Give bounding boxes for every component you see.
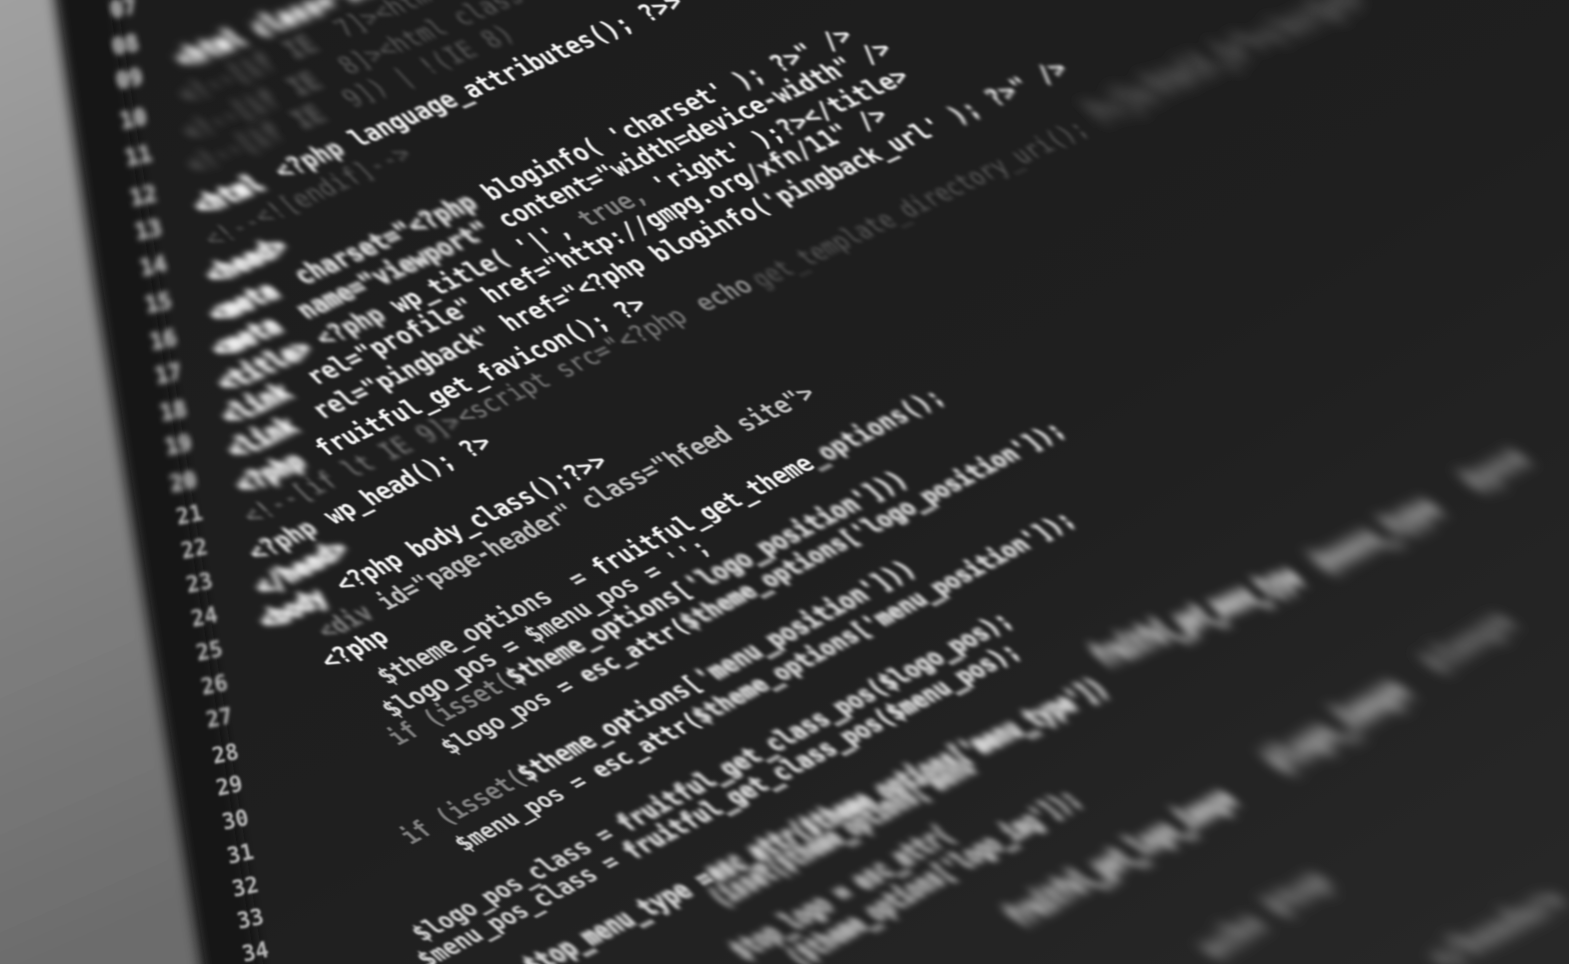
code lines: document head: <?php: [266, 135, 352, 186]
code lines: page header: 'logo_position'])): [677, 466, 915, 597]
code lines: document head: wp_head(); ?>: [316, 429, 500, 530]
code lines: page header: $logo_pos =: [433, 667, 593, 759]
code lines: document head: <script src="<?php: [448, 302, 695, 430]
code lines: page header: 'menu_position'])): [687, 555, 923, 691]
code lines: document head: <title>: [209, 334, 320, 397]
line numbers: 18: [158, 397, 189, 427]
blurred distant code lines: $logo_image: [1257, 673, 1418, 779]
code lines: page header: <div: [310, 599, 381, 645]
line numbers: 14: [138, 252, 169, 282]
code lines: page header: esc_attr(: [571, 613, 696, 688]
top conditional comment lines: <!--[if: [179, 118, 290, 180]
code lines: page header: fruitful_get_class_pos($menu_pos);: [615, 638, 1027, 864]
code lines: page header: fruitful_get_theme: [583, 450, 821, 581]
blurred distant code lines: fruitful_get_logo_image: [997, 782, 1244, 932]
blurred distant code lines: [516, 0, 1569, 964]
code lines: document head: wp_title(: [382, 244, 518, 319]
blurred distant code lines: $pos: [1452, 440, 1537, 497]
line numbers: 25: [194, 637, 225, 667]
line numbers: 26: [199, 671, 230, 701]
line numbers: 32: [230, 873, 261, 903]
line numbers: [108, 0, 271, 964]
line numbers: 30: [220, 806, 251, 836]
code lines: page header: $menu_pos =: [447, 763, 606, 856]
code lines: document head: <link: [213, 378, 299, 430]
line numbers: 24: [189, 603, 220, 633]
top conditional comment lines: IE: [277, 30, 324, 65]
code lines: document head: <link: [219, 412, 305, 464]
code lines: document head: </head>: [246, 535, 356, 601]
line numbers: 22: [179, 535, 210, 565]
monitor bezel shadow: [52, 0, 262, 964]
code lines: document head: true,: [570, 181, 655, 233]
code lines: document head: content="width=device: [489, 91, 775, 234]
code lines: document head: 'right' );: [644, 119, 792, 199]
code lines: page header: id="page-header" class="hfeed site">: [369, 379, 823, 615]
line numbers: 29: [214, 772, 245, 802]
top conditional comment lines: IE: [281, 67, 328, 102]
line numbers: 11: [123, 142, 154, 172]
code lines: document head: name="viewport": [289, 210, 512, 325]
code lines: page header: if (isset(: [392, 765, 534, 849]
code lines: document head: href="<?php bloginfo(: [493, 193, 778, 337]
line numbers: 12: [128, 182, 159, 212]
code lines: document head: <?php: [240, 514, 325, 567]
code lines: document head: ?></title>: [769, 62, 917, 142]
line numbers: 08: [110, 31, 141, 61]
line numbers: 16: [148, 326, 179, 356]
line numbers: 13: [133, 216, 164, 246]
line numbers: 33: [235, 905, 266, 935]
blurred distant code lines: (isset($theme_options['menu: [702, 752, 983, 912]
line numbers: 09: [114, 65, 145, 95]
top conditional comment lines: [167, 0, 577, 180]
line numbers: 19: [163, 431, 194, 461]
top conditional comment lines: <!--[if: [171, 48, 282, 110]
code lines: document head: fruitful_get_favicon(); ?>: [307, 290, 654, 463]
blurred distant code lines: $image: [1412, 605, 1522, 679]
code lines: document head: <head>: [197, 232, 295, 289]
code lines: page header: $theme_options =: [370, 559, 607, 689]
code lines: document head: ); ?>" />: [725, 21, 861, 95]
blurred distant code lines: $menu_type: [1302, 490, 1448, 578]
code lines: document head: rel="profile": [298, 292, 483, 391]
code lines: document head: <?php: [308, 301, 393, 353]
code lines: page header: $logo_pos = $menu_pos = '';: [374, 533, 717, 722]
code lines: document head: href="http://gmpg.org: [474, 165, 759, 309]
code lines: document head: charset="<?php: [286, 183, 497, 290]
code lines: page header: _options();: [797, 383, 951, 472]
code lines: document head: <?php: [227, 447, 313, 499]
code lines: page header: [251, 379, 1082, 964]
wall behind monitor: [0, 0, 203, 964]
code lines: document head: ); ?>" />: [940, 54, 1076, 130]
blurred distant code lines: esc_attr($theme_options['menu_type']): [698, 673, 1115, 888]
code lines: page header: $theme_options['menu_position']);: [685, 506, 1082, 728]
line numbers: 27: [204, 704, 235, 734]
code lines: document head: rel="pingback": [304, 321, 502, 425]
code lines: document head: <!--<![endif]-->: [196, 140, 419, 253]
line numbers: 28: [210, 740, 241, 770]
blurred distant code lines: fruitful_get_menu_type: [1083, 559, 1309, 673]
code lines: page header: <?php: [313, 623, 396, 675]
line numbers: 20: [168, 468, 199, 498]
top conditional comment lines: IE: [285, 100, 332, 135]
line numbers: 10: [118, 105, 149, 135]
code lines: page header: $theme_options[: [498, 576, 699, 690]
code lines: page header: if (isset(: [380, 668, 522, 750]
code lines: document head: '|',: [507, 216, 580, 262]
line numbers: 31: [225, 840, 256, 870]
code lines: document head: [186, 0, 1095, 601]
code lines: document head: <html: [186, 169, 271, 221]
code lines: page header: <?php body_class();?>>: [327, 448, 615, 598]
top conditional comment lines: <!--[if: [175, 85, 286, 147]
code lines: document head: <meta: [203, 312, 289, 363]
blurred distant code lines: $top_logo = esc_attr(: [723, 821, 961, 964]
code lines: document head: echo: [687, 271, 760, 317]
code lines: page header: <body: [251, 583, 334, 635]
code lines: page header: $theme_options[: [509, 670, 709, 786]
line numbers: 15: [143, 289, 174, 319]
line numbers: 17: [153, 360, 184, 390]
code lines: page header: $logo_pos_class =: [405, 816, 633, 946]
code lines: document head: 'pingback_url': [754, 112, 952, 216]
code lines: page header: $theme_options['logo_position']);: [672, 417, 1072, 634]
code lines: document head: bloginfo( 'charset': [475, 71, 748, 206]
code lines: document head: -width" />: [752, 35, 900, 115]
line numbers: 23: [184, 569, 215, 599]
line numbers: 21: [174, 501, 205, 531]
code lines: document head: language_: [342, 80, 478, 153]
code lines: document head: /xfn/11" />: [736, 101, 896, 188]
code lines: page header: fruitful_get_class_pos($logo_pos);: [609, 607, 1019, 836]
code lines: document head: <!--[if lt IE 9]>: [235, 408, 469, 530]
code lines: document head: <meta: [201, 277, 286, 329]
top conditional comment lines: 9]) | !(IE 8): [335, 19, 522, 113]
code lines: page header: esc_attr(: [583, 708, 708, 783]
code lines: document head: get_template_directory_uri();: [744, 115, 1095, 293]
blurred distant code lines: echo $top: [1190, 864, 1339, 964]
